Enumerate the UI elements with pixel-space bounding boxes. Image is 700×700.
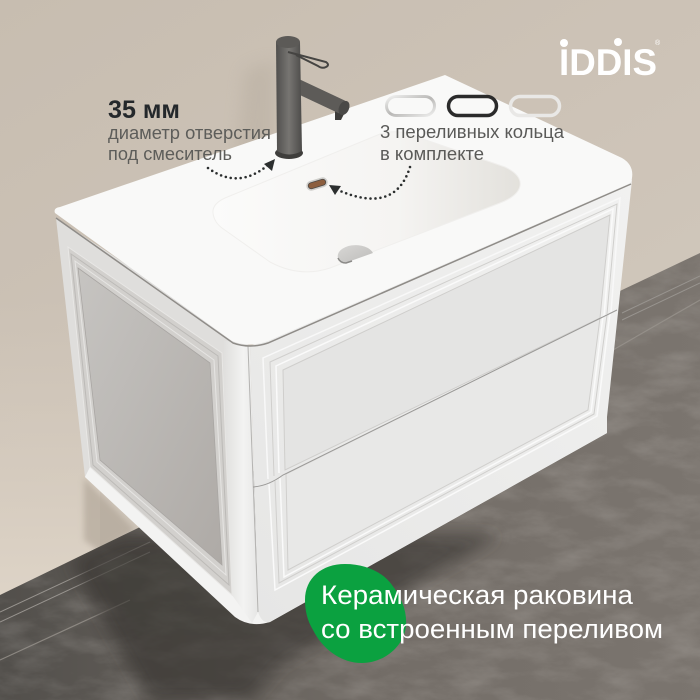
callout: 35 mm: под смеситель xyxy=(108,144,232,164)
white ring xyxy=(510,96,560,116)
faucet spout xyxy=(335,110,345,120)
green blob xyxy=(305,564,406,663)
cabinet side panel xyxy=(56,218,256,617)
drain xyxy=(338,245,373,263)
callout: 3 rings: в комплекте xyxy=(380,144,484,164)
dotted arrow to tap hole xyxy=(208,159,275,178)
side recessed moulding xyxy=(68,247,232,595)
headline: со встроенным переливом xyxy=(321,614,663,644)
floor and baseboard xyxy=(0,250,700,700)
logo: IDDIS: IDDIS xyxy=(559,42,657,83)
chrome ring xyxy=(386,96,434,116)
front of cabinet xyxy=(250,180,632,622)
upper drawer with moulding xyxy=(263,198,620,479)
callout: 3 rings: 3 переливных кольца xyxy=(380,122,565,142)
headline xyxy=(321,580,663,644)
lower drawer with moulding xyxy=(269,313,610,590)
faucet body xyxy=(276,42,302,154)
callout: 35 mm xyxy=(108,96,271,164)
callout: 35 mm: диаметр отверстия xyxy=(108,123,271,143)
callout: 3 rings xyxy=(380,122,565,164)
dotted arrow to overflow xyxy=(329,167,410,199)
cabinet body xyxy=(56,180,632,624)
ceramic countertop xyxy=(55,75,632,346)
cabinet bottom trim xyxy=(85,417,607,624)
logo: IDDIS: ® xyxy=(655,39,661,47)
sink basin xyxy=(213,132,520,272)
black ring xyxy=(448,96,496,116)
overflow hole xyxy=(305,176,329,192)
three overflow rings xyxy=(386,96,560,116)
rounded corner band xyxy=(222,340,258,623)
faucet base xyxy=(275,147,303,159)
faucet xyxy=(275,36,352,159)
callout: 35 mm: 35 мм xyxy=(108,96,180,124)
drawer gap xyxy=(253,310,617,487)
faucet handle loop xyxy=(288,52,328,68)
headline: Керамическая раковина xyxy=(321,580,634,610)
